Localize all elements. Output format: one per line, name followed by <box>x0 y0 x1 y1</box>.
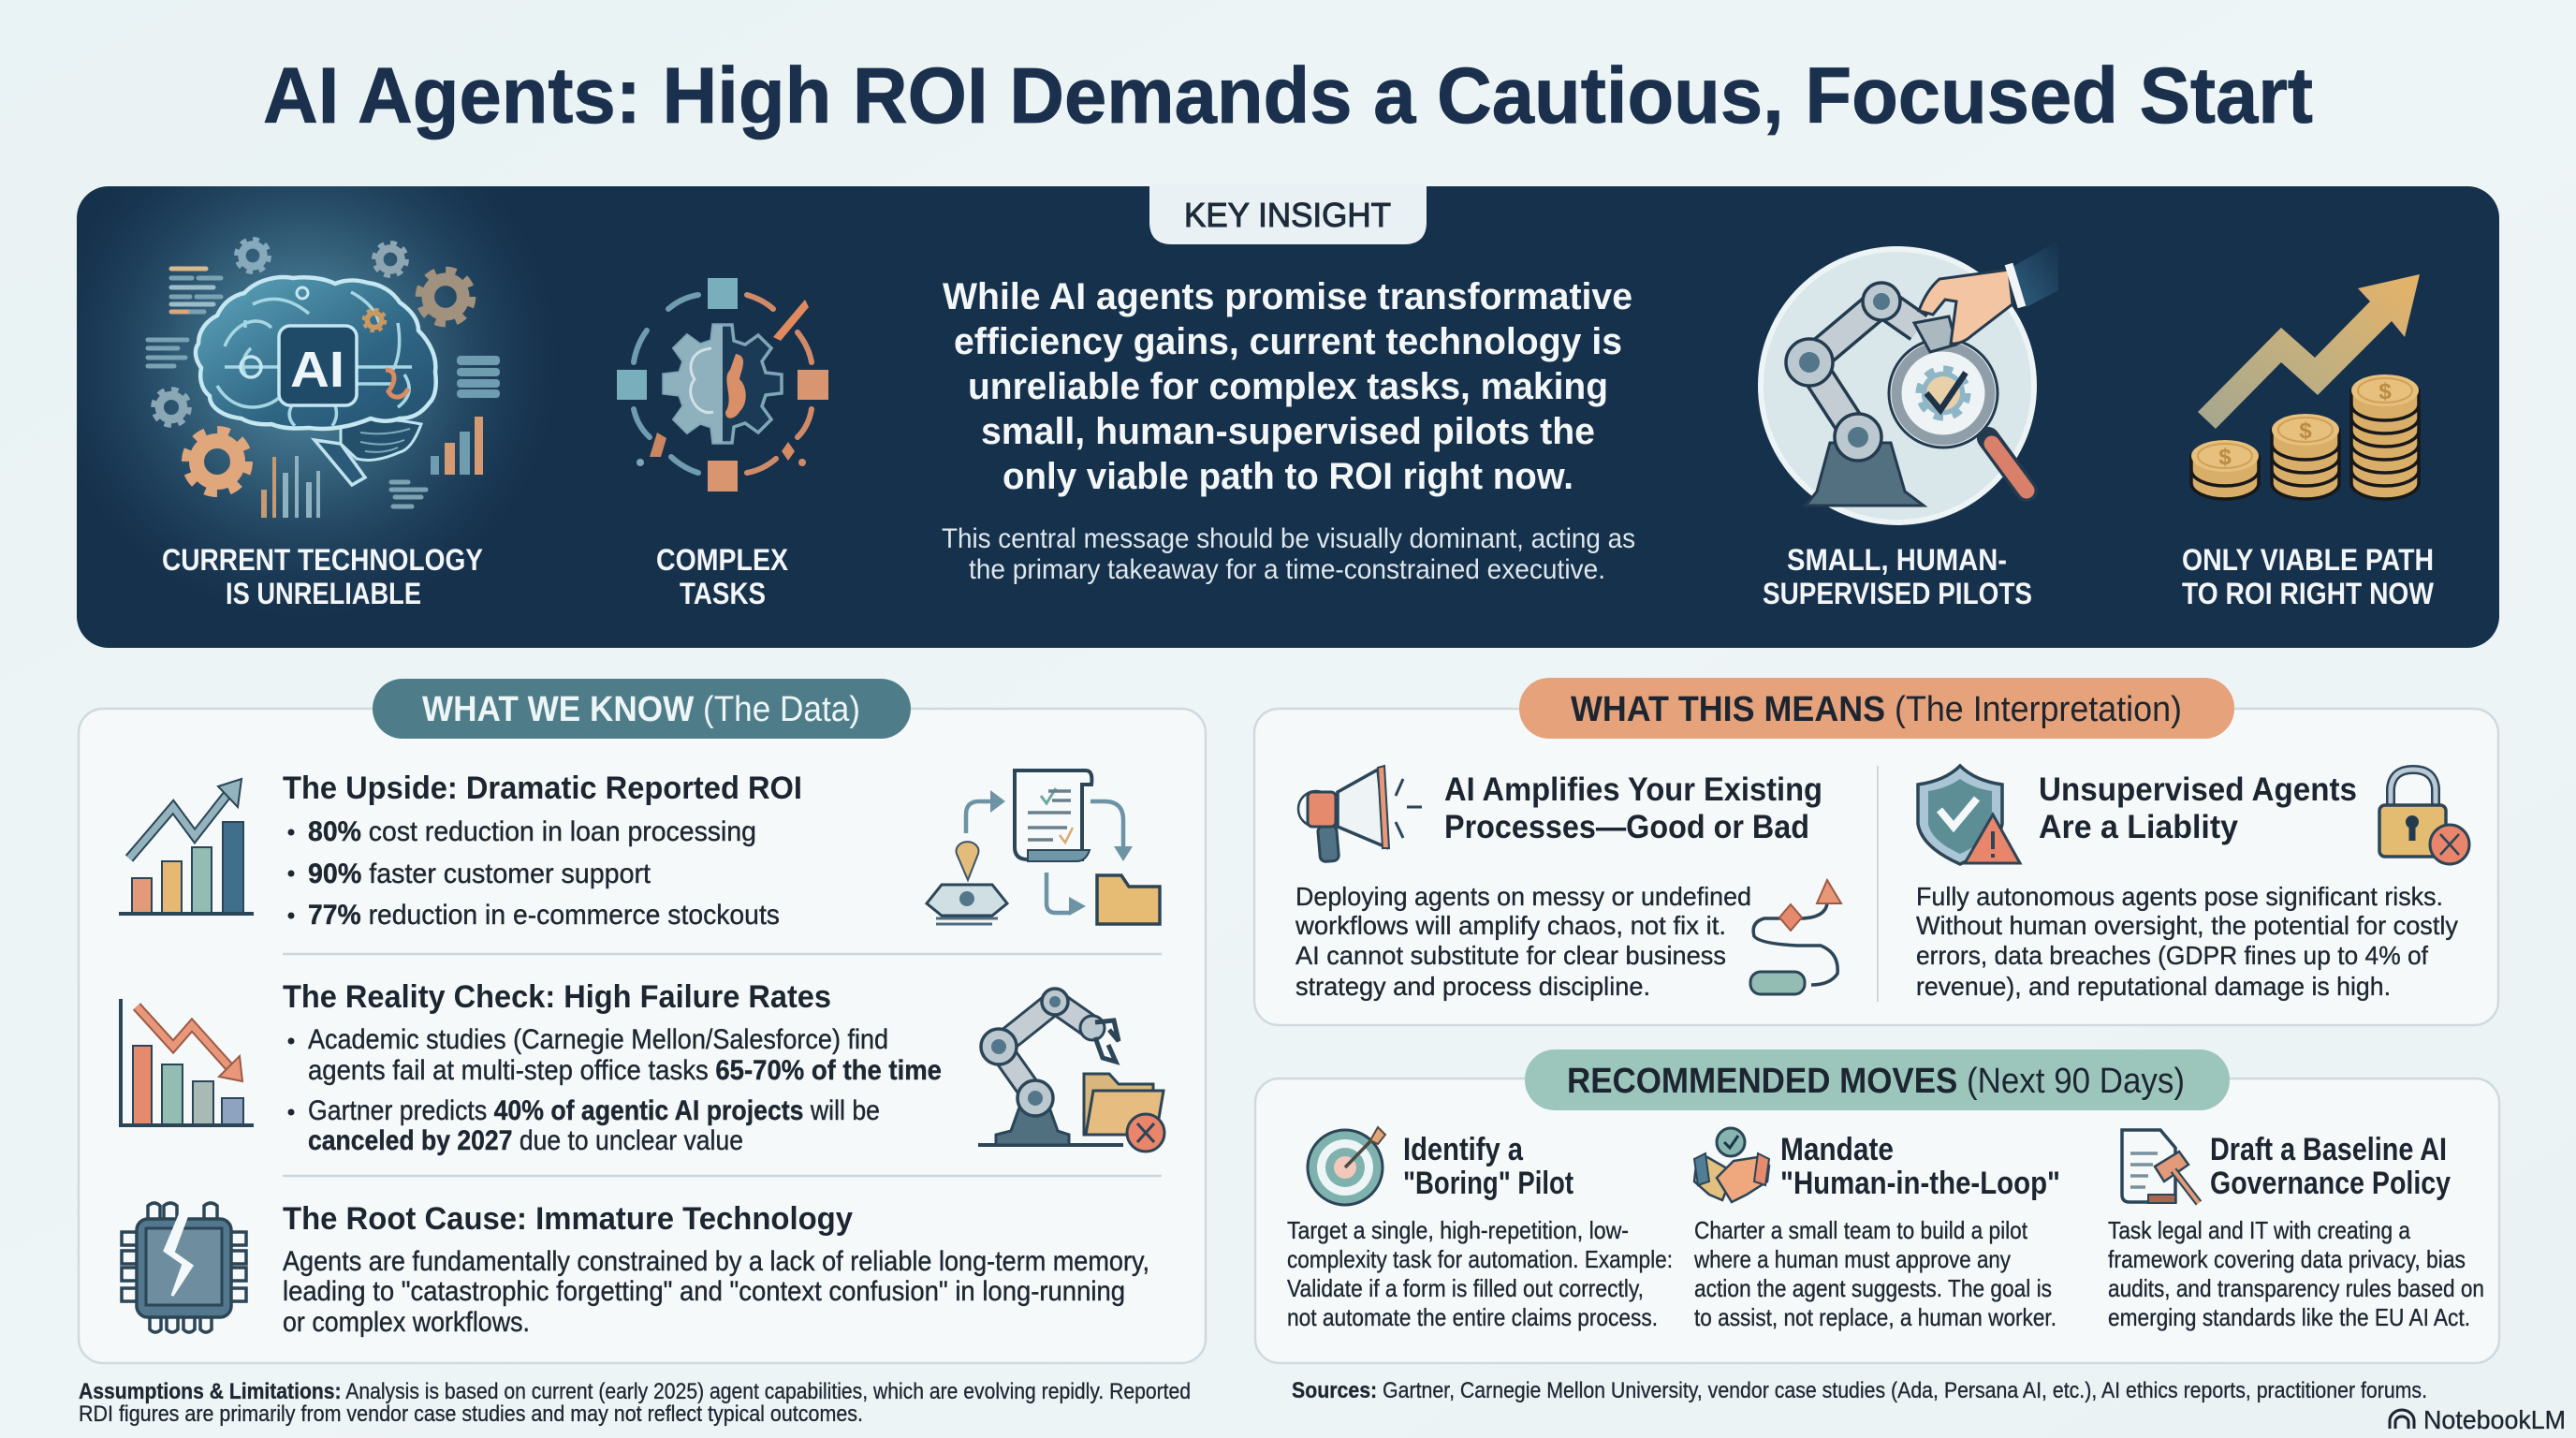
heading pill: what this means <box>1519 678 2234 739</box>
icon: padlock <box>2379 770 2469 864</box>
move: boring pilot <box>1287 1132 1673 1331</box>
section: the root cause: The Root Cause: Immature Technology <box>283 1201 853 1237</box>
item: unsupervised agents: errors, data breaches (GDPR fines up to 4% of <box>1916 941 2428 970</box>
footnote: sources: Sources: Gartner, Carnegie Mellon University, vendor case studies (Ada, Persana AI, etc.), AI ethics reports, practitioner forums. <box>1292 1378 2427 1403</box>
move: governance policy: Governance Policy <box>2210 1166 2451 1201</box>
heading pill: what this means: WHAT THIS MEANS (The Interpretation) <box>1571 690 2182 729</box>
panel: recommended moves <box>1255 1049 2499 1363</box>
section: the reality check: canceled by 2027 due to unclear value <box>308 1125 743 1156</box>
move: boring pilot: "Boring" Pilot <box>1403 1166 1573 1201</box>
section: the root cause: leading to "catastrophic forgetting" and "context confusion" in long-running <box>283 1276 1125 1307</box>
move: boring pilot: Target a single, high-repetition, low- <box>1287 1216 1629 1244</box>
item: unsupervised agents: Fully autonomous agents pose significant risks. <box>1916 882 2443 911</box>
icon: broken chip <box>122 1203 246 1332</box>
icon: falling bar chart <box>121 999 254 1125</box>
key insight message: efficiency gains, current technology is <box>954 321 1622 362</box>
item: unsupervised agents: Without human oversight, the potential for costly <box>1916 911 2458 940</box>
key insight tab <box>1149 184 1427 244</box>
move: boring pilot: not automate the entire claims process. <box>1287 1303 1658 1331</box>
icon: AI brain with gears: AI <box>290 342 344 398</box>
section: the upside: 90% faster customer support <box>308 858 651 889</box>
move: governance policy <box>2108 1132 2484 1331</box>
item: unsupervised agents <box>1916 771 2458 1001</box>
icon: rising arrow and coin stacks <box>2191 274 2420 499</box>
heading pill: recommended moves: RECOMMENDED MOVES (Next 90 Days) <box>1567 1062 2185 1101</box>
caption: only viable path: ONLY VIABLE PATH <box>2182 543 2434 577</box>
caption: current technology: CURRENT TECHNOLOGY <box>162 543 483 577</box>
panel: what we know <box>79 679 1206 1363</box>
icon: human-supervised robot arm <box>1761 241 2058 522</box>
section: the root cause: or complex workflows. <box>283 1307 530 1338</box>
section: the root cause: Agents are fundamentally constrained by a lack of reliable long-term memory, <box>283 1246 1149 1277</box>
move: human in the loop: to assist, not replace, a human worker. <box>1694 1303 2056 1331</box>
key insight message: small, human-supervised pilots the <box>981 411 1595 452</box>
caption: only viable path <box>2182 543 2435 610</box>
section: the reality check: agents fail at multi-step office tasks 65-70% of the time <box>308 1055 942 1086</box>
caption: human-supervised pilots: SMALL, HUMAN- <box>1787 543 2007 577</box>
section: the reality check: Academic studies (Carnegie Mellon/Salesforce) find <box>308 1024 888 1055</box>
icon: rising arrow and coin stacks: $ <box>2299 418 2312 444</box>
item: ai amplifies <box>1295 771 1822 1001</box>
panel: key insight <box>77 186 2499 648</box>
key insight message: only viable path to ROI right now. <box>1003 456 1573 497</box>
icon: target <box>1308 1127 1385 1205</box>
section: the upside: 80% cost reduction in loan processing <box>308 816 756 847</box>
key insight tab: KEY INSIGHT <box>1184 196 1391 234</box>
caption: human-supervised pilots <box>1763 543 2032 610</box>
key insight message: unreliable for complex tasks, making <box>968 366 1608 407</box>
supporting message: the primary takeaway for a time-constrained executive. <box>969 554 1605 585</box>
icon: complex tasks gear <box>617 278 828 492</box>
supporting message: This central message should be visually dominant, acting as <box>942 523 1635 554</box>
icon: handshake with check <box>1694 1128 1769 1202</box>
move: human in the loop: Mandate <box>1780 1132 1894 1167</box>
move: human in the loop: "Human-in-the-Loop" <box>1780 1166 2060 1201</box>
footnote: assumptions and limitations: RDI figures are primarily from vendor case studies and may not reflect typical outcomes. <box>79 1401 863 1427</box>
section: the reality check <box>283 979 942 1156</box>
item: unsupervised agents: Are a Liablity <box>2039 809 2239 845</box>
section: the upside: 77% reduction in e-commerce stockouts <box>308 900 780 931</box>
key insight message: While AI agents promise transformative <box>943 276 1632 317</box>
icon: rising bar chart <box>119 779 254 914</box>
caption: complex tasks: COMPLEX <box>656 543 789 577</box>
footnote: assumptions and limitations <box>79 1379 1191 1427</box>
caption: current technology: IS UNRELIABLE <box>226 577 421 610</box>
section: the upside <box>283 770 802 931</box>
move: human in the loop <box>1693 1132 2060 1331</box>
move: governance policy: audits, and transparency rules based on <box>2108 1274 2484 1302</box>
item: ai amplifies: AI cannot substitute for clear business <box>1295 941 1726 970</box>
caption: complex tasks <box>656 543 789 610</box>
move: boring pilot: Validate if a form is filled out correctly, <box>1287 1274 1644 1302</box>
heading pill: recommended moves <box>1525 1049 2230 1110</box>
caption: current technology <box>162 543 483 610</box>
move: human in the loop: Charter a small team to build a pilot <box>1694 1216 2028 1244</box>
item: ai amplifies: Deploying agents on messy or undefined <box>1295 882 1751 911</box>
item: unsupervised agents: Unsupervised Agents <box>2039 771 2357 808</box>
panel: what this means <box>1254 678 2498 1025</box>
icon: document workflow <box>927 770 1160 924</box>
supporting message <box>942 523 1635 585</box>
item: ai amplifies: workflows will amplify chaos, not fix it. <box>1295 911 1726 940</box>
icon: megaphone <box>1298 766 1422 862</box>
caption: human-supervised pilots: SUPERVISED PILOTS <box>1763 577 2032 610</box>
icon: messy workflow <box>1750 880 1841 994</box>
icon: shield with warning <box>1918 766 2020 864</box>
title: AI Agents: High ROI Demands a Cautious, Focused Start <box>263 51 2313 139</box>
item: ai amplifies: strategy and process discipline. <box>1295 972 1650 1001</box>
item: unsupervised agents: revenue), and reputational damage is high. <box>1916 972 2391 1001</box>
caption: complex tasks: TASKS <box>680 577 766 610</box>
footnote: assumptions and limitations: Assumptions & Limitations: Analysis is based on current (early 2025) agent capabilities, which are evolving repidly. Reported <box>79 1379 1191 1404</box>
icon: robot arm with folder <box>978 989 1164 1152</box>
move: governance policy: Task legal and IT with creating a <box>2108 1216 2410 1244</box>
move: governance policy: emerging standards like the EU AI Act. <box>2108 1303 2470 1331</box>
section: the root cause <box>283 1201 1149 1338</box>
icon: rising arrow and coin stacks: $ <box>2218 445 2232 470</box>
move: governance policy: framework covering data privacy, bias <box>2108 1245 2466 1273</box>
move: human in the loop: action the agent suggests. The goal is <box>1694 1274 2052 1302</box>
section: the reality check: The Reality Check: High Failure Rates <box>283 979 831 1015</box>
section: the reality check: Gartner predicts 40% of agentic AI projects will be <box>308 1095 880 1126</box>
move: boring pilot: complexity task for automation. Example: <box>1287 1245 1673 1273</box>
move: boring pilot: Identify a <box>1403 1132 1524 1167</box>
heading pill: what we know: WHAT WE KNOW (The Data) <box>422 690 860 729</box>
heading pill: what we know <box>373 679 911 739</box>
icon: AI brain with gears <box>148 240 500 518</box>
item: ai amplifies: Processes—Good or Bad <box>1444 809 1809 845</box>
move: governance policy: Draft a Baseline AI <box>2210 1132 2447 1167</box>
key insight message <box>943 276 1632 497</box>
item: ai amplifies: AI Amplifies Your Existing <box>1444 771 1822 808</box>
move: human in the loop: where a human must approve any <box>1693 1245 2011 1273</box>
section: the upside: The Upside: Dramatic Reported ROI <box>283 770 802 806</box>
icon: rising arrow and coin stacks: $ <box>2378 379 2392 404</box>
logo: NotebookLM: NotebookLM <box>2423 1405 2566 1434</box>
icon: document and gavel <box>2122 1130 2199 1203</box>
caption: only viable path: TO ROI RIGHT NOW <box>2182 577 2435 610</box>
